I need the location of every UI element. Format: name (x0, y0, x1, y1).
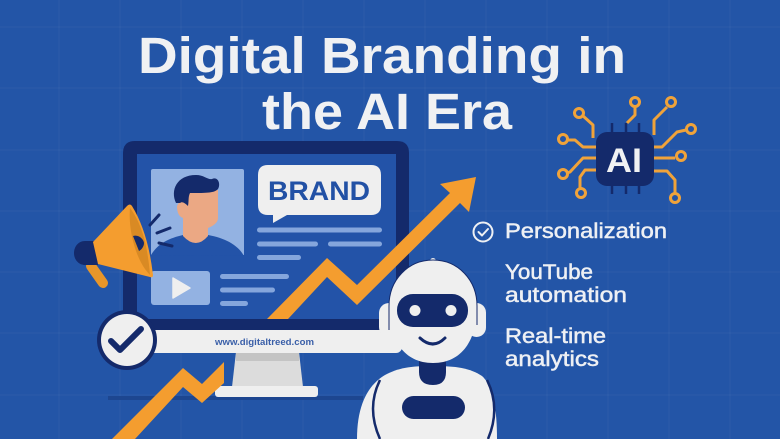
icon: check circle (474, 222, 492, 242)
feature list: analytics (505, 348, 599, 371)
brand speech bubble (258, 165, 381, 223)
robot (357, 258, 497, 439)
lower growth arrow (112, 362, 224, 439)
growth arrow (267, 177, 476, 319)
title (138, 27, 626, 140)
feature list: YouTube (505, 261, 593, 284)
video thumbnail (151, 271, 210, 305)
AI chip icon (558, 98, 696, 202)
feature list: Personalization (505, 220, 667, 243)
AI chip icon: AI (606, 142, 642, 180)
check badge (97, 310, 157, 370)
feature list (474, 220, 667, 371)
feature list: automation (505, 284, 627, 307)
content text lines (220, 228, 382, 306)
megaphone icon (74, 204, 172, 283)
title: the AI Era (262, 83, 513, 140)
website url: www.digitaltreed.com (214, 337, 314, 348)
title: Digital Branding in (138, 27, 626, 84)
brand speech bubble: BRAND (268, 176, 370, 206)
feature list: Real-time (505, 325, 606, 348)
monitor (108, 141, 409, 400)
profile photo panel (151, 169, 244, 256)
